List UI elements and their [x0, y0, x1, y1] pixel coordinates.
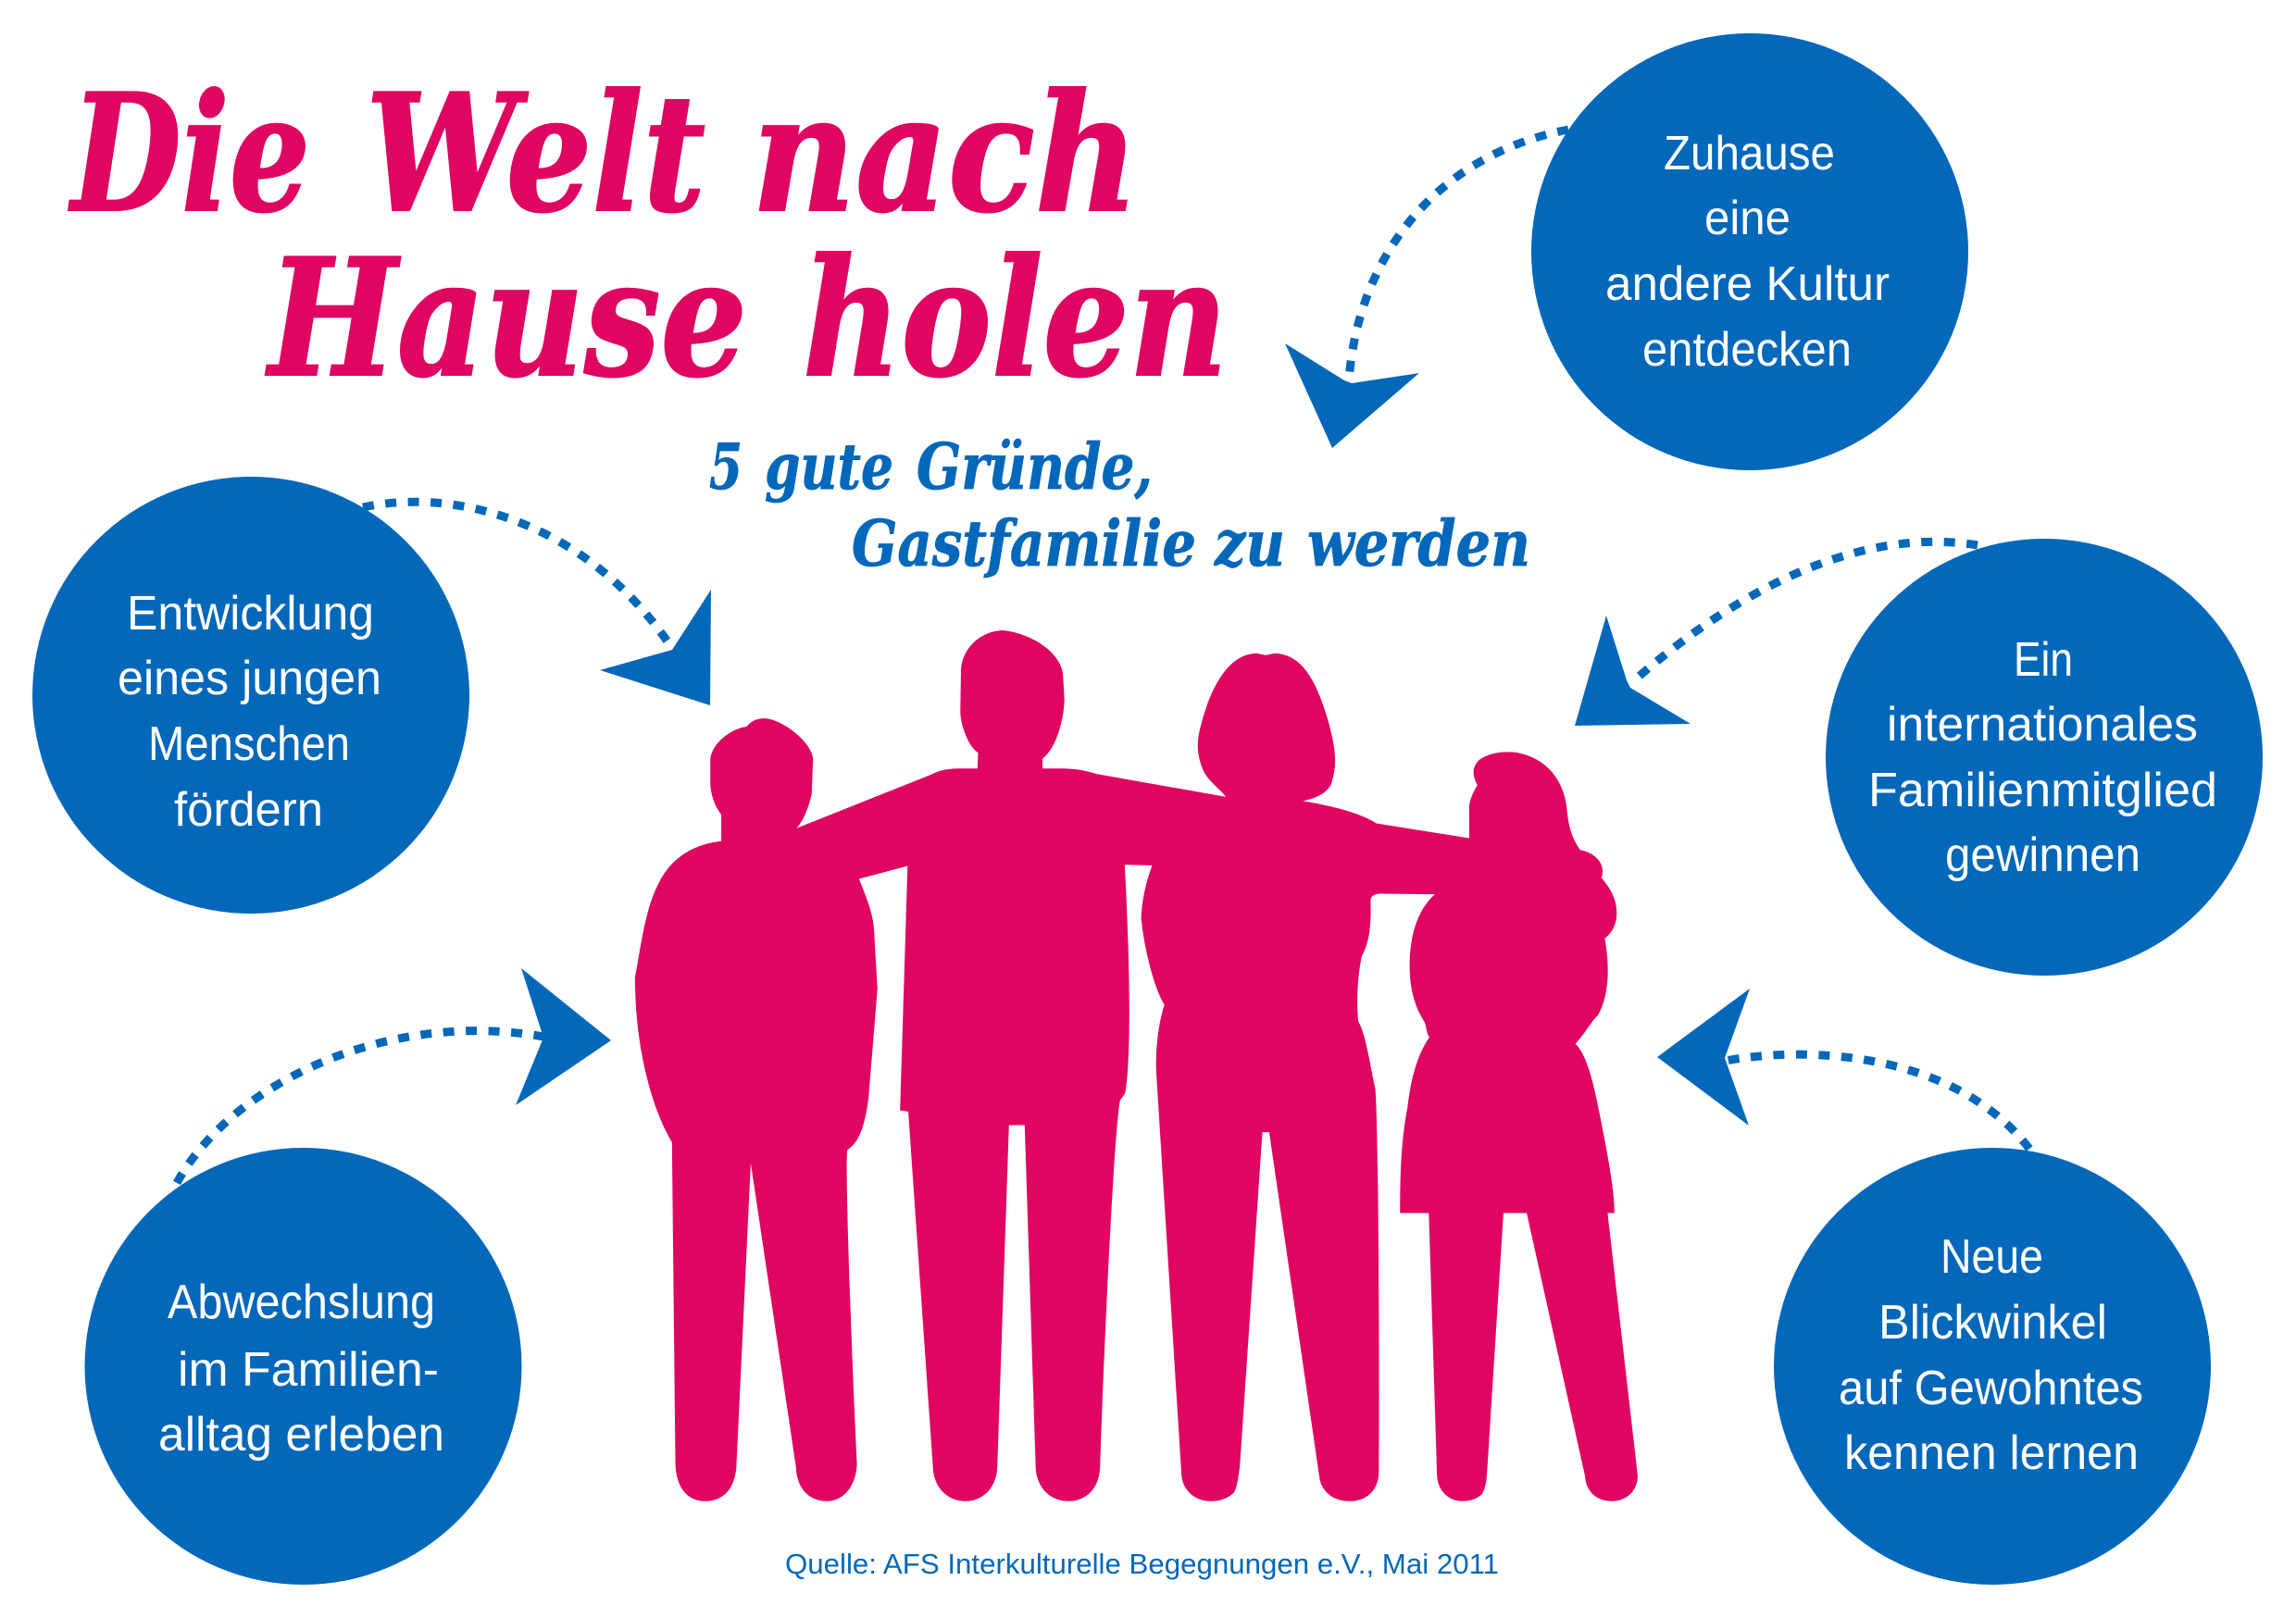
panel: Neue Blickwinkel auf Gewohntes kennen lernen: Blickwinkel — [1878, 1296, 2107, 1350]
title — [68, 59, 1228, 414]
arrow: lower left circle to family — [177, 968, 611, 1183]
subtitle: zu — [1214, 507, 1285, 581]
subtitle: gute — [765, 430, 893, 504]
arrow: left circle to family — [363, 502, 711, 705]
panel: Neue Blickwinkel auf Gewohntes kennen lernen: auf Gewohntes — [1839, 1362, 2143, 1415]
panel: Zuhause eine andere Kultur entdecken: andere Kultur — [1605, 257, 1890, 311]
panel: Neue Blickwinkel auf Gewohntes kennen lernen: Neue — [1940, 1230, 2043, 1284]
panel: Abwechslung im Familienalltag erleben: alltag erleben — [158, 1408, 444, 1462]
panel: Ein internationales Familienmitglied gewinnen: Ein — [2014, 633, 2073, 687]
subtitle: Gründe, — [917, 430, 1153, 504]
subtitle: Gastfamilie — [852, 507, 1196, 581]
title: Welt — [366, 59, 705, 249]
panel: Ein internationales Familienmitglied gewinnen: internationales — [1887, 698, 2198, 752]
subtitle: 5 — [709, 430, 742, 504]
panel: Abwechslung im Familienalltag erleben — [85, 1148, 522, 1585]
title: Die — [68, 59, 310, 249]
panel: Ein internationales Familienmitglied gewinnen: Familienmitglied — [1868, 764, 2217, 817]
panel: Entwicklung eines jungen Menschen fördern: Menschen — [148, 717, 350, 771]
silhouette: family of four — [635, 630, 1638, 1501]
subtitle: werden — [1307, 507, 1530, 581]
panel: Zuhause eine andere Kultur entdecken — [1531, 33, 1968, 470]
arrow: right circle to family — [1575, 541, 1978, 726]
panel: Zuhause eine andere Kultur entdecken: entdecken — [1642, 323, 1852, 377]
panel: Entwicklung eines jungen Menschen fördern — [32, 477, 469, 914]
arrow: top right circle to family — [1285, 130, 1568, 448]
panel: Ein internationales Familienmitglied gewinnen — [1826, 539, 2263, 976]
panel: Entwicklung eines jungen Menschen fördern: Entwicklung — [127, 587, 374, 641]
subtitle — [709, 430, 1530, 581]
panel: Abwechslung im Familienalltag erleben: im Familien- — [178, 1343, 439, 1397]
panel: Zuhause eine andere Kultur entdecken: eine — [1704, 192, 1791, 245]
panel: Entwicklung eines jungen Menschen fördern: fördern — [174, 783, 323, 837]
title: nach — [752, 59, 1139, 249]
arrow: lower right circle to family — [1657, 989, 2029, 1149]
title: Hause — [265, 224, 747, 414]
panel: Neue Blickwinkel auf Gewohntes kennen lernen: kennen lernen — [1844, 1426, 2139, 1480]
source line: Quelle: AFS Interkulturelle Begegnungen e.V., Mai 2011 — [785, 1548, 1499, 1580]
panel: Ein internationales Familienmitglied gewinnen: gewinnen — [1945, 828, 2140, 882]
panel: Neue Blickwinkel auf Gewohntes kennen lernen — [1774, 1148, 2211, 1585]
panel: Entwicklung eines jungen Menschen fördern: eines jungen — [118, 652, 381, 705]
title: holen — [803, 224, 1228, 414]
panel: Zuhause eine andere Kultur entdecken: Zuhause — [1664, 127, 1835, 180]
panel: Abwechslung im Familienalltag erleben: Abwechslung — [168, 1276, 435, 1329]
